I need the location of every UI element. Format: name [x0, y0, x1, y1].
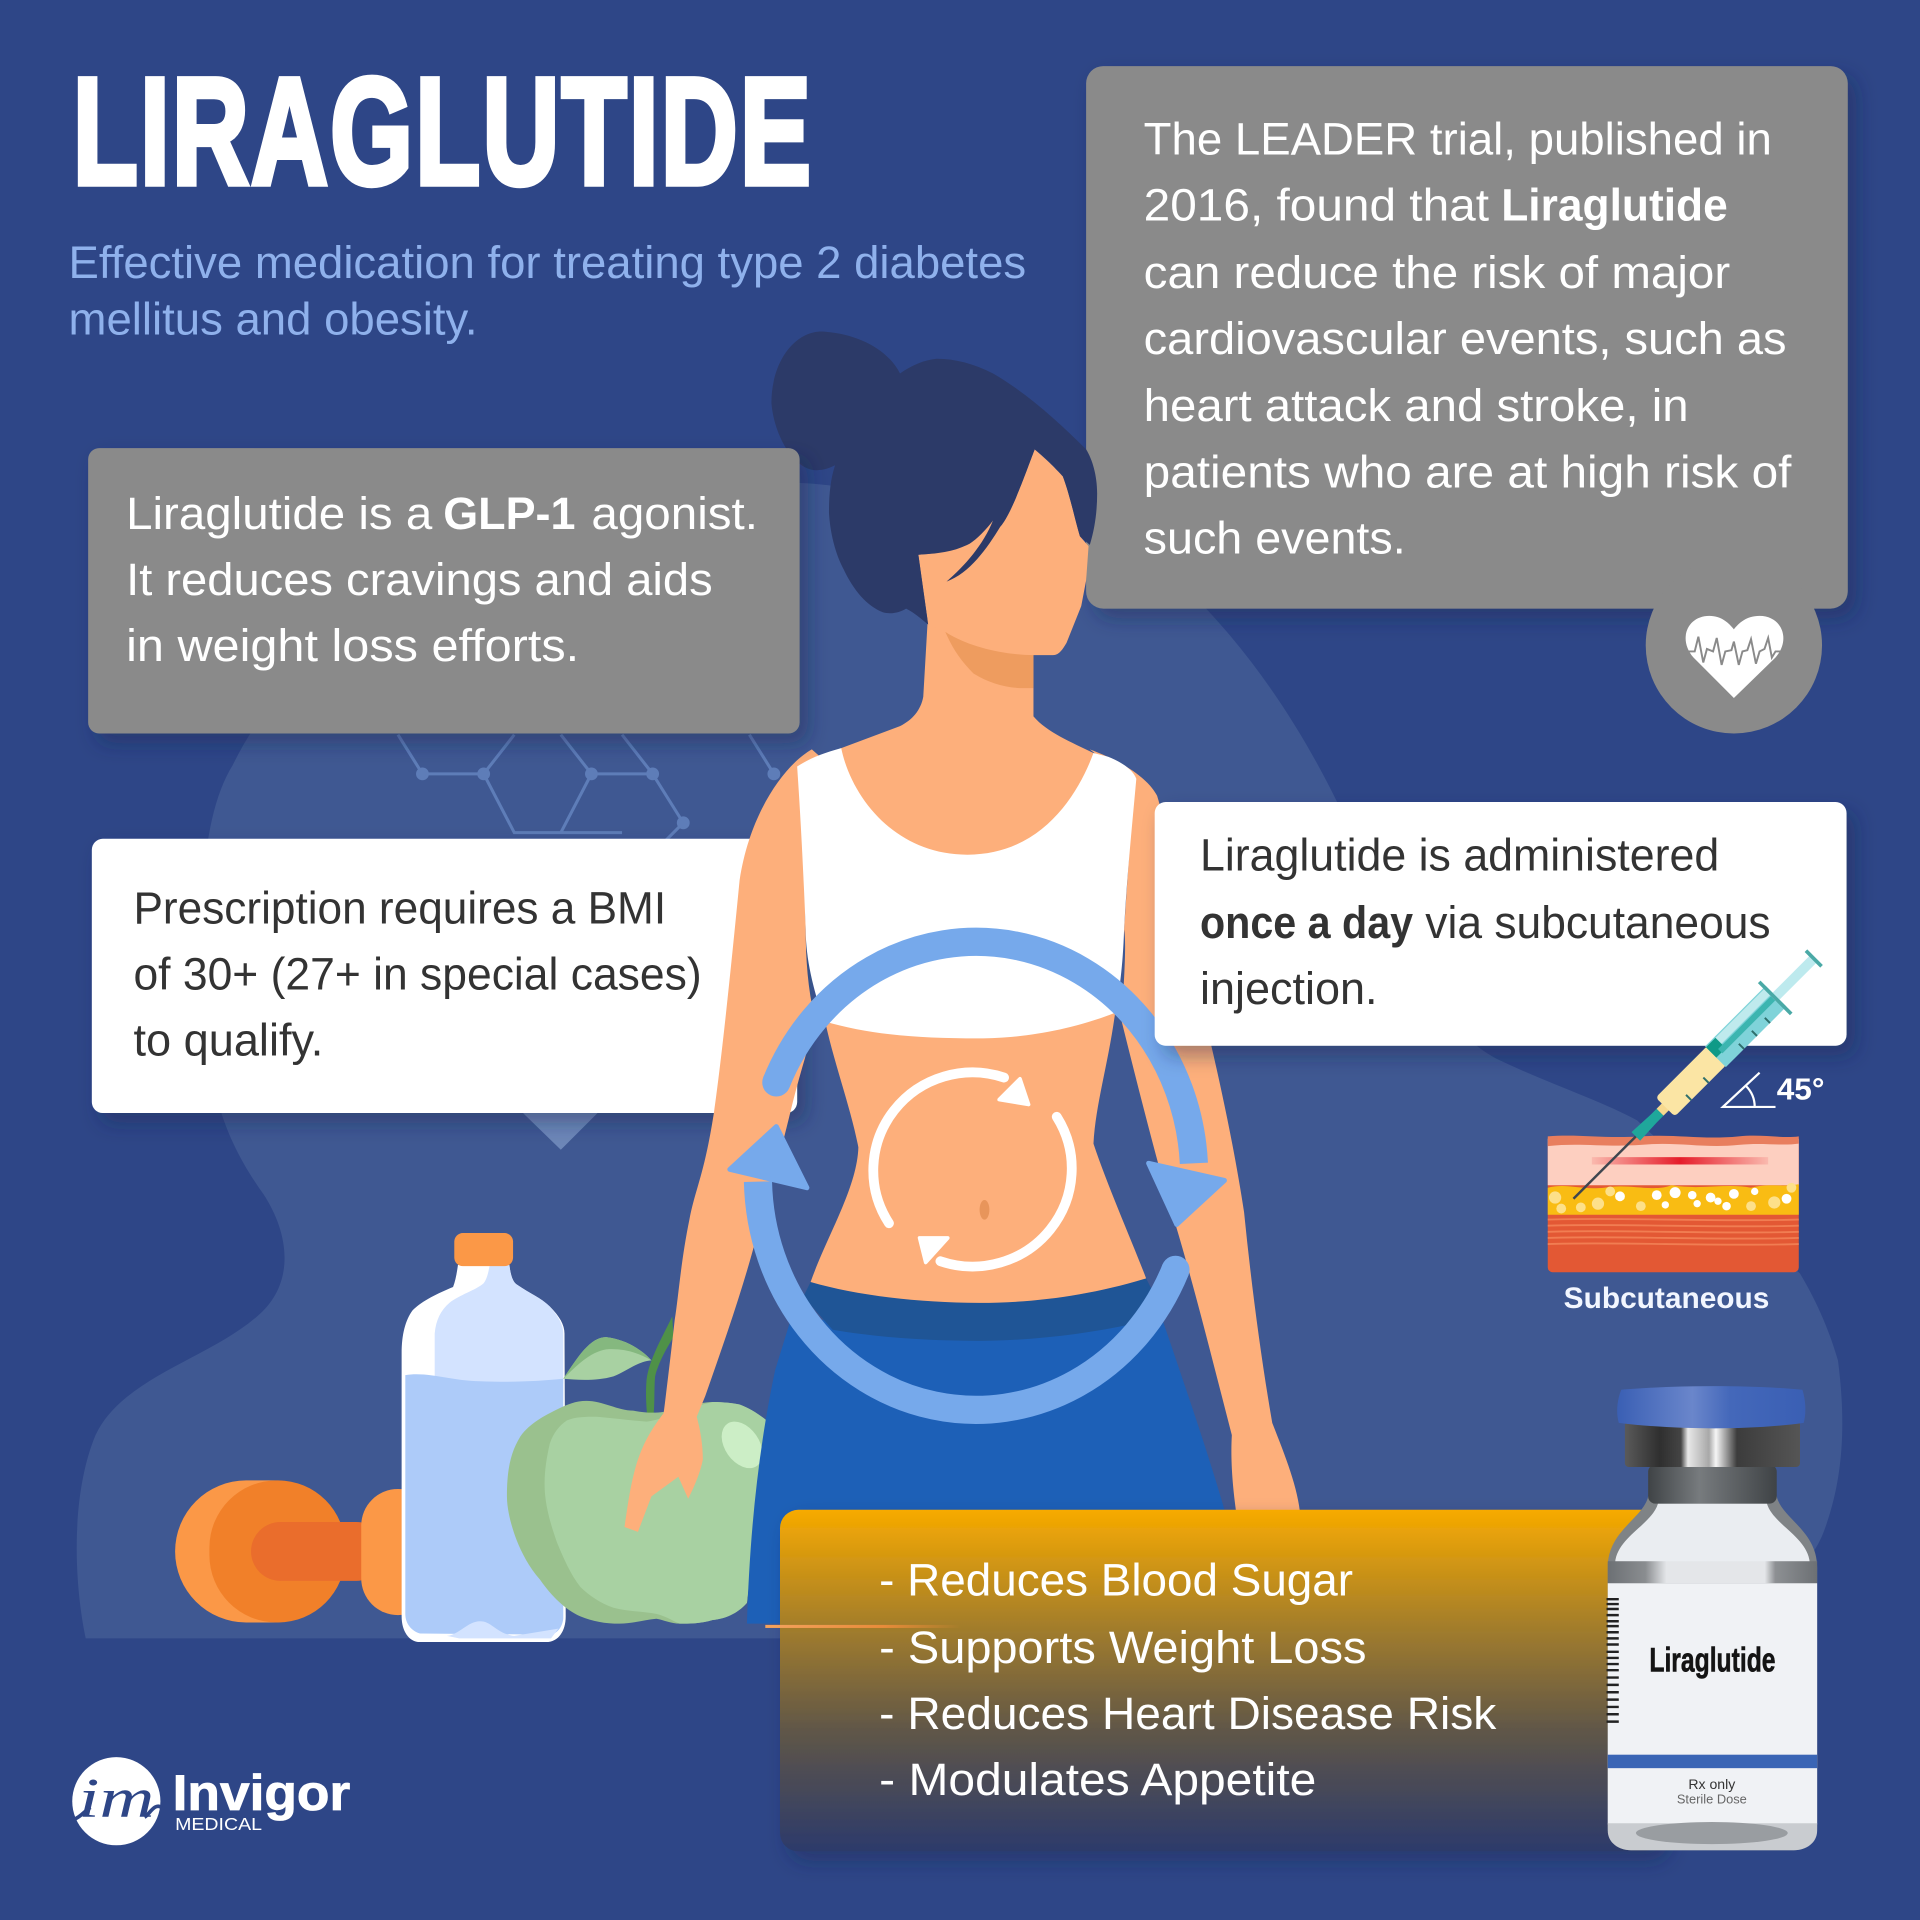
- waistband: [803, 1278, 1153, 1341]
- face: [918, 449, 1089, 655]
- text: LEADER trial description: cardiovascular events, such as: [1144, 313, 1787, 364]
- woman illustration: [624, 332, 1300, 1624]
- logo: Invigor Medical: im: [78, 1768, 154, 1830]
- subtitle: mellitus and obesity.: [69, 293, 478, 344]
- text: GLP-1 description: GLP-1: [443, 488, 576, 539]
- label: subcutaneous: Subcutaneous: [1564, 1282, 1769, 1315]
- vial shoulder highlight: [1615, 1504, 1810, 1562]
- vial metal collar: [1625, 1420, 1800, 1467]
- title: LIRAGLUTIDE: [73, 46, 811, 216]
- logo: Invigor Medical: MEDICAL: [175, 1814, 262, 1834]
- logo: Invigor Medical: Invigor: [173, 1765, 350, 1821]
- text: benefits: - Reduces Heart Disease Risk: [879, 1688, 1497, 1739]
- text: benefits: [879, 1555, 1497, 1805]
- vial small print: Rx only: [1688, 1776, 1736, 1792]
- left arm: [624, 749, 823, 1532]
- text: benefits: - Supports Weight Loss: [879, 1622, 1367, 1673]
- vial barcode: [1607, 1599, 1619, 1722]
- arrow ring: inner cycle: [873, 1072, 1072, 1267]
- text: GLP-1 description: It reduces cravings and aids: [126, 554, 713, 605]
- subtitle: Effective medication for treating type 2 diabetes: [69, 237, 1026, 288]
- text: GLP-1 description: [126, 488, 758, 671]
- feet line: [765, 1625, 961, 1628]
- waist: [811, 1010, 1146, 1303]
- skirt: [747, 1293, 1227, 1624]
- vial glass body: [1608, 1496, 1817, 1850]
- navel: [980, 1200, 989, 1220]
- icon: dumbbell: [175, 1480, 435, 1622]
- icon: 45 degree angle: 45°: [1777, 1073, 1824, 1107]
- icon: 45 degree angle: [1723, 1073, 1824, 1107]
- panel: benefits list: [765, 1510, 1662, 1851]
- vial label name: Liraglutide: [1649, 1641, 1776, 1679]
- text: benefits: - Reduces Blood Sugar: [879, 1555, 1353, 1606]
- text: BMI requirement: [133, 882, 702, 1066]
- vial small print: [1677, 1776, 1747, 1807]
- text: benefits: - Modulates Appetite: [879, 1754, 1316, 1805]
- icon: water bottle: [402, 1233, 566, 1642]
- neck and chest: [796, 612, 1133, 882]
- vial dark band: [1608, 1561, 1817, 1583]
- text: LEADER trial description: Liraglutide: [1501, 179, 1728, 230]
- logo: Invigor Medical: [72, 1757, 350, 1845]
- panel: daily injection: [1155, 802, 1847, 1046]
- vial of liraglutide: [1607, 1386, 1817, 1850]
- text: GLP-1 description: agonist.: [591, 488, 758, 539]
- panel: BMI prescription: [92, 839, 797, 1113]
- text: GLP-1 description: in weight loss efforts.: [126, 620, 579, 671]
- text: BMI requirement: Prescription requires a BMI: [133, 882, 666, 933]
- text: LEADER trial description: [1144, 113, 1792, 563]
- diamond marker under white card: [518, 1108, 602, 1150]
- vial base: [1608, 1823, 1817, 1850]
- background blob: [77, 482, 1842, 1638]
- text: injection description: once a day: [1200, 897, 1413, 948]
- vial small print: Sterile Dose: [1677, 1792, 1747, 1807]
- text: LEADER trial description: such events.: [1144, 512, 1406, 563]
- panel: LEADER trial: [1086, 66, 1848, 733]
- vial cap: [1617, 1386, 1805, 1428]
- text: injection description: [1200, 830, 1771, 1014]
- text: LEADER trial description: 2016, found that: [1144, 179, 1489, 230]
- text: GLP-1 description: Liraglutide is a: [126, 488, 433, 539]
- text: injection description: Liraglutide is administered: [1200, 830, 1719, 881]
- text: LEADER trial description: patients who are at high risk of: [1144, 446, 1792, 497]
- subtitle: [69, 237, 1026, 344]
- hair: [771, 332, 1097, 624]
- skin cross-section diagram: [1548, 1136, 1799, 1272]
- text: BMI requirement: to qualify.: [133, 1015, 323, 1066]
- right arm: [1090, 749, 1300, 1516]
- panel: GLP-1 agonist: [88, 448, 800, 733]
- text: LEADER trial description: can reduce the risk of major: [1144, 247, 1730, 298]
- icon: syringe: [1558, 942, 1831, 1215]
- top garment: [797, 748, 1136, 1038]
- icon: heart with pulse: [1685, 616, 1785, 698]
- icon: apple: [507, 1316, 771, 1624]
- vial label: [1608, 1583, 1817, 1824]
- text: injection description: via subcutaneous: [1425, 897, 1771, 948]
- text: BMI requirement: of 30+ (27+ in special cases): [133, 948, 702, 999]
- arrow ring: outer cycle: [730, 942, 1224, 1410]
- vial neck: [1648, 1464, 1777, 1504]
- text: LEADER trial description: The LEADER trial, published in: [1144, 113, 1772, 164]
- text: injection description: injection.: [1200, 963, 1378, 1014]
- neck shadow: [945, 632, 1033, 688]
- vial blue stripe: [1608, 1755, 1817, 1768]
- hexagon molecule pattern: [398, 735, 779, 845]
- text: LEADER trial description: heart attack and stroke, in: [1144, 380, 1689, 431]
